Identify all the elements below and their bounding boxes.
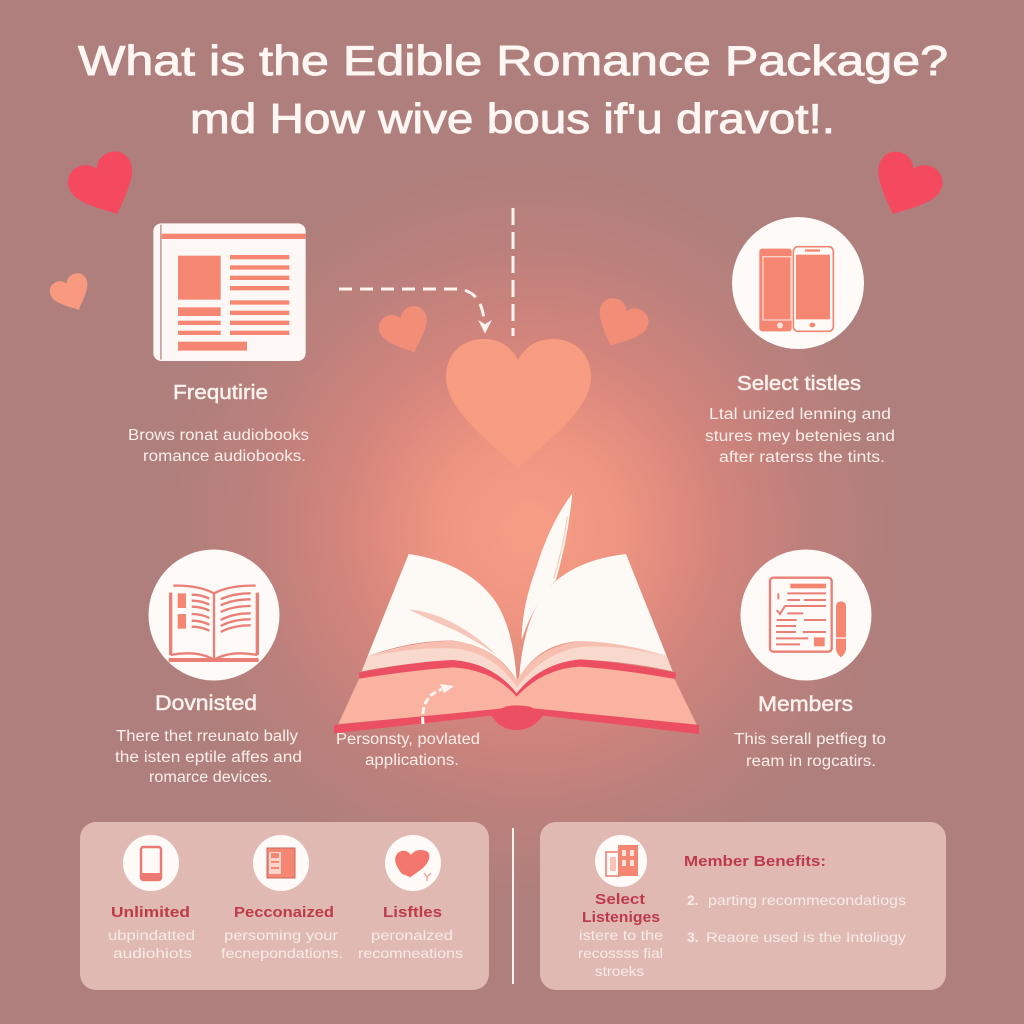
text block: benefits list: Member Benefits: [684, 853, 826, 870]
text block: select tistles: stures mey betenies and [705, 428, 895, 445]
feature: listfles: Lisftles [383, 904, 442, 921]
panel: features [80, 822, 489, 990]
feather page [522, 493, 572, 640]
icon: small heart left [47, 270, 97, 318]
text block: select listeniges: istere to the [579, 927, 663, 943]
icon: phone [123, 835, 179, 891]
page stack [362, 641, 673, 693]
title: What is the Edible Romance Package? [78, 37, 948, 84]
icon: heart chat [385, 835, 441, 891]
text block: downloaded: the isten eptile affes and [115, 749, 302, 766]
icon: small heart centre right [588, 294, 653, 356]
text block: benefits list: Reaore used is the Intoliogy [706, 929, 906, 945]
icon: newspaper [153, 223, 306, 361]
feature: personalized [221, 904, 343, 961]
panel: member benefits [540, 822, 946, 990]
right page [519, 554, 667, 677]
feature: unlimited: audiohiots [113, 945, 192, 961]
text block: members: Members [758, 693, 853, 716]
text block: frequtirie [128, 382, 309, 465]
feature: personalized: Pecconaized [234, 904, 334, 921]
text block: book caption: Personsty, povlated [336, 731, 480, 748]
panel divider [512, 828, 514, 984]
text block: frequtirie: Brows ronat audiobooks [128, 427, 309, 444]
feature: unlimited: Unlimited [111, 904, 190, 921]
text block: downloaded: There thet rreunato bally [116, 728, 298, 745]
text block: benefits list: parting recommecondatiogs [708, 892, 906, 908]
icon: small heart centre left [375, 302, 437, 362]
text block: book caption: applications. [365, 752, 459, 769]
text block: frequtirie: romance audiobooks. [143, 448, 306, 465]
icon: article [253, 835, 309, 891]
text block: select tistles: Ltal unized lenning and [709, 406, 891, 423]
text block: members: This serall petfieg to [734, 731, 886, 748]
text block: select listeniges: Select [595, 891, 645, 908]
feature: personalized: fecnepondations. [221, 945, 343, 961]
feather crease [554, 517, 567, 579]
text block: benefits list: 2. [687, 892, 699, 908]
left page [368, 554, 517, 680]
title: md How wive bous if'u dravot!. [190, 95, 835, 142]
text block: members: ream in rogcatirs. [746, 753, 876, 770]
left page fold [409, 609, 497, 655]
icon: phones circle [732, 217, 864, 349]
text block: book caption [336, 731, 480, 769]
bottom red cover [334, 705, 699, 734]
red band [359, 659, 676, 697]
title [78, 37, 948, 142]
feature: unlimited: ubpindatted [108, 927, 195, 943]
text block: select tistles: after raterss the tints. [719, 449, 885, 466]
text block: frequtirie: Frequtirie [173, 382, 268, 404]
vertical dashed line [512, 208, 514, 336]
text block: select tistles: Select tistles [737, 373, 861, 395]
arrow: small curved [423, 684, 454, 724]
feature: listfles: peronalzed [371, 927, 453, 943]
text block: select listeniges [578, 891, 663, 979]
text block: select listeniges: Listeniges [582, 909, 660, 926]
text block: select listeniges: stroeks [595, 963, 644, 979]
feature: listfles [358, 904, 463, 961]
text block: members [734, 693, 886, 770]
page stack shadow [370, 641, 663, 687]
text block: downloaded [115, 692, 302, 786]
icon: large central heart [446, 339, 591, 468]
icon: heart top left [62, 146, 148, 228]
feature: personalized: persoming your [224, 927, 338, 943]
feature: listfles: recomneations [358, 945, 463, 961]
text block: select listeniges: recossss fial [578, 945, 663, 961]
text block: select tistles [705, 373, 895, 466]
icon: open book circle [148, 550, 280, 680]
book base [338, 660, 697, 725]
icon: heart top right [862, 146, 948, 228]
icon: document circle [740, 550, 872, 680]
feature: unlimited [108, 904, 195, 961]
arrow: dashed curve to heart [339, 289, 490, 332]
icon: books [595, 835, 647, 887]
text block: benefits list [684, 853, 906, 945]
open book illustration [334, 493, 699, 734]
text block: benefits list: 3. [687, 929, 699, 945]
text block: downloaded: Dovnisted [155, 692, 257, 715]
text block: downloaded: romarce devices. [149, 769, 272, 786]
